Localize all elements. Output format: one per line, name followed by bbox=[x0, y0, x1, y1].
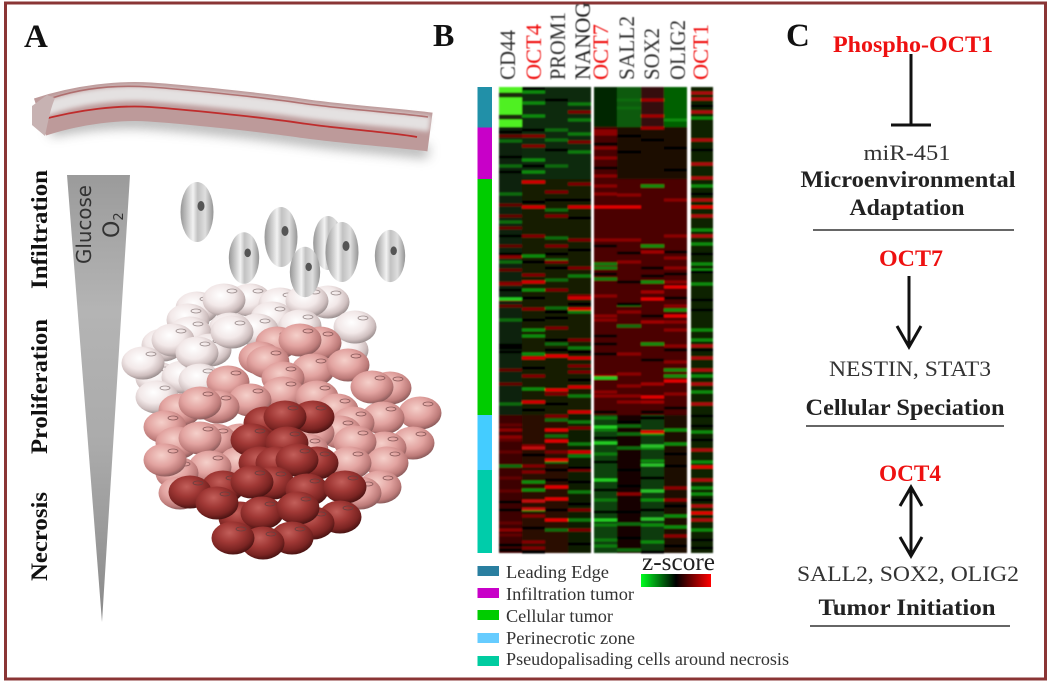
legend: tumor regions: Leading Edge bbox=[506, 562, 609, 582]
legend: tumor regions bbox=[478, 562, 789, 669]
color scale: z-score bbox=[641, 549, 715, 587]
region color bar bbox=[478, 87, 492, 553]
column 6 rows bbox=[617, 100, 641, 550]
pink proliferating cells bbox=[144, 324, 442, 510]
label: NESTIN, STAT3: NESTIN, STAT3 bbox=[829, 356, 991, 381]
column 5 rows bbox=[594, 131, 617, 546]
panel: A tumor model bbox=[24, 19, 442, 622]
column 1 rows bbox=[499, 95, 522, 550]
label: O2: O bbox=[100, 221, 125, 238]
heat map bbox=[499, 87, 713, 553]
label: Glucose: Glucose bbox=[72, 185, 96, 264]
label: Cellular Speciation: Cellular Speciation bbox=[806, 395, 1005, 420]
label: z-score: z-score bbox=[642, 549, 715, 576]
column 4 rows bbox=[568, 104, 591, 544]
region backgrounds bbox=[499, 87, 713, 553]
label: OCT7: OCT7 bbox=[879, 246, 943, 271]
oxygen and glucose gradient wedge bbox=[67, 175, 130, 622]
gene labels: NANOG bbox=[570, 2, 595, 80]
heading: C: C bbox=[786, 18, 810, 54]
column 3 rows bbox=[545, 100, 568, 530]
arrow: OCT7 to NESTIN bbox=[897, 276, 921, 347]
column 2 rows bbox=[522, 89, 545, 552]
label: Proliferation: Proliferation bbox=[27, 319, 52, 454]
legend: tumor regions: Pseudopalisading cells around necrosis bbox=[506, 649, 789, 669]
double arrow: OCT4 and targets bbox=[900, 487, 922, 556]
gene labels bbox=[495, 2, 713, 80]
label: Infiltration: Infiltration bbox=[27, 170, 52, 289]
legend: tumor regions: Infiltration tumor bbox=[506, 584, 634, 604]
heading: B: B bbox=[433, 17, 454, 53]
gene labels: OCT7 bbox=[588, 24, 613, 80]
column 9 rows bbox=[691, 93, 713, 548]
blood vessel bbox=[32, 86, 430, 152]
dark necrotic cells bbox=[168, 400, 366, 560]
inhibition arrow bbox=[891, 54, 931, 125]
heading: A: A bbox=[24, 19, 48, 55]
label: Necrosis: Necrosis bbox=[27, 492, 52, 581]
gene labels: OLIG2 bbox=[665, 20, 690, 80]
gene labels: OCT4 bbox=[521, 24, 546, 80]
column 7 rows bbox=[641, 100, 664, 552]
legend: tumor regions: Cellular tumor bbox=[506, 606, 613, 626]
pale proliferating cells bbox=[122, 284, 376, 414]
label: Microenvironmental Adaptation bbox=[800, 167, 1016, 220]
spindle infiltrating cells bbox=[180, 182, 405, 297]
legend: tumor regions: Perinecrotic zone bbox=[506, 628, 635, 648]
gene labels: SOX2 bbox=[639, 28, 664, 80]
gene labels: SALL2 bbox=[614, 16, 639, 80]
label: O2: 2 bbox=[112, 212, 127, 221]
label: Microenvironmental Adaptation: Adaptation bbox=[850, 195, 965, 220]
label: Phospho-OCT1: Phospho-OCT1 bbox=[833, 32, 993, 57]
gene labels: PROM1 bbox=[545, 12, 570, 80]
label: miR-451: miR-451 bbox=[864, 140, 950, 165]
label: SALL2, SOX2, OLIG2: SALL2, SOX2, OLIG2 bbox=[797, 561, 1019, 586]
panel: C pathway bbox=[786, 18, 1019, 626]
label: Microenvironmental Adaptation: Microenvironmental bbox=[800, 167, 1016, 192]
panel: B heat map bbox=[433, 2, 789, 669]
column 8 rows bbox=[664, 120, 687, 546]
label: OCT4: OCT4 bbox=[879, 461, 942, 486]
gene labels: CD44 bbox=[495, 30, 520, 80]
label: Tumor Initiation: Tumor Initiation bbox=[818, 595, 996, 620]
gene labels: OCT1 bbox=[688, 24, 713, 80]
